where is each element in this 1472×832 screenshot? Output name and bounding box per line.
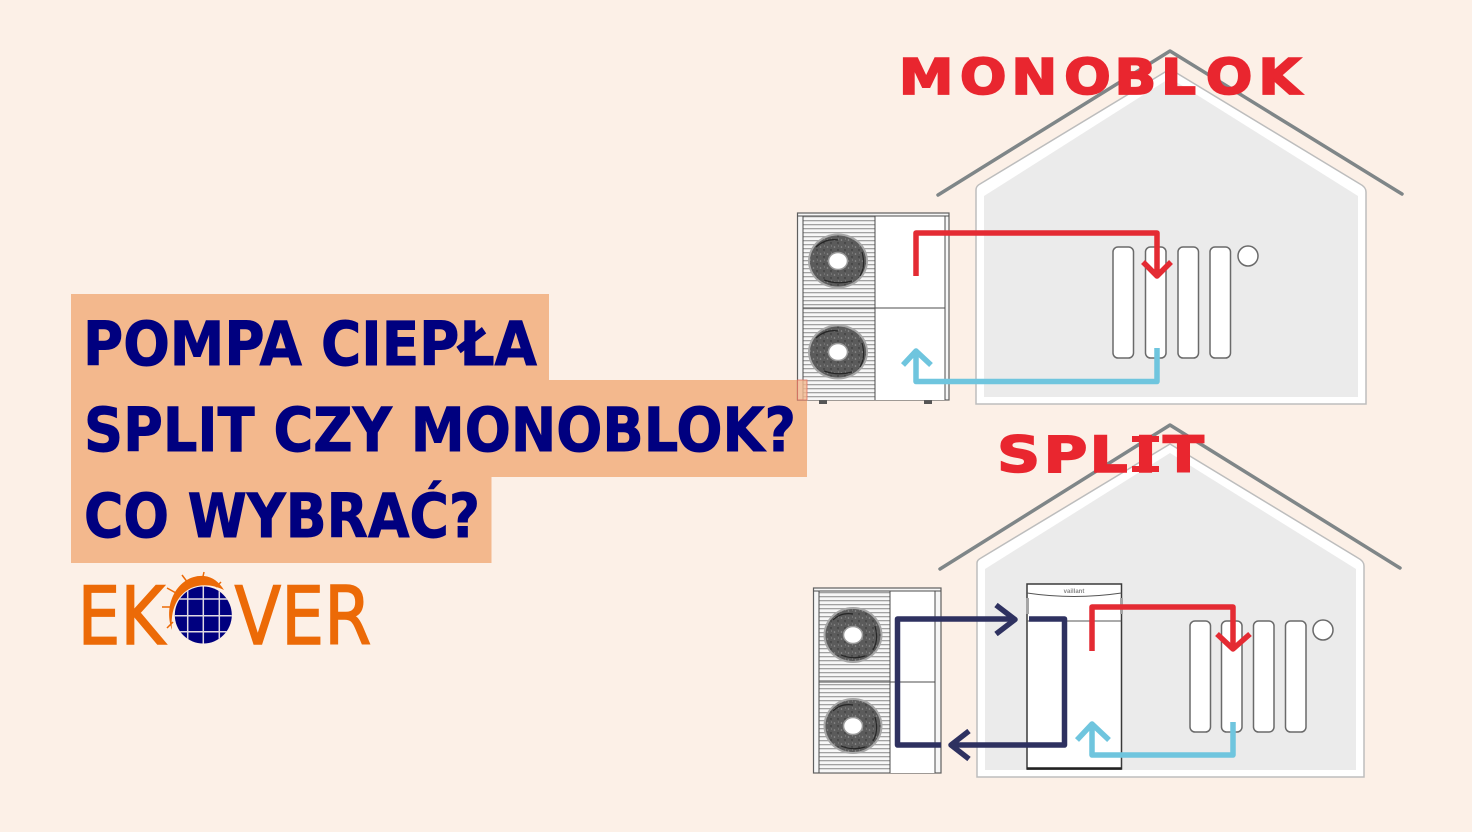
icon: fan bottom xyxy=(824,698,882,754)
heading: split: SPLIT xyxy=(997,427,1204,485)
arrow: hot water xyxy=(916,233,1171,276)
title highlight boxes xyxy=(71,294,807,563)
heat pump outdoor unit xyxy=(814,588,941,773)
logo text left: EK xyxy=(78,570,167,663)
panel: monoblok diagram xyxy=(798,50,1402,404)
heading: monoblok: MONOBLOK xyxy=(899,50,1303,106)
icon: fan top xyxy=(808,234,868,288)
heat pump outdoor unit xyxy=(798,213,949,404)
icon: fan top xyxy=(824,607,882,663)
overlap tint on title box xyxy=(798,380,807,400)
radiator xyxy=(1190,620,1333,732)
indoor unit xyxy=(1026,584,1123,769)
house: monoblok xyxy=(938,51,1402,404)
icon: fan bottom xyxy=(808,324,868,380)
arrow: refrigerant loop xyxy=(898,605,1064,759)
arrow: cold water xyxy=(903,348,1157,382)
title xyxy=(71,294,807,563)
title line 1: POMPA CIEPŁA xyxy=(83,309,537,380)
title line 2: SPLIT CZY MONOBLOK? xyxy=(84,395,796,466)
title line 3: CO WYBRAĆ? xyxy=(84,481,480,552)
arrow: hot water xyxy=(1092,607,1250,651)
icon: solar panel globe xyxy=(174,586,232,644)
indoor unit: vaillant xyxy=(1064,589,1084,595)
logo text right: VER xyxy=(234,570,372,663)
arrow: cold water xyxy=(1077,722,1233,755)
radiator xyxy=(1113,246,1258,358)
icon: sun arc xyxy=(162,572,224,630)
logo: EKOVER xyxy=(84,572,370,645)
panel: split diagram xyxy=(814,425,1400,777)
infographic canvas xyxy=(71,49,1404,778)
house: split xyxy=(940,425,1400,777)
